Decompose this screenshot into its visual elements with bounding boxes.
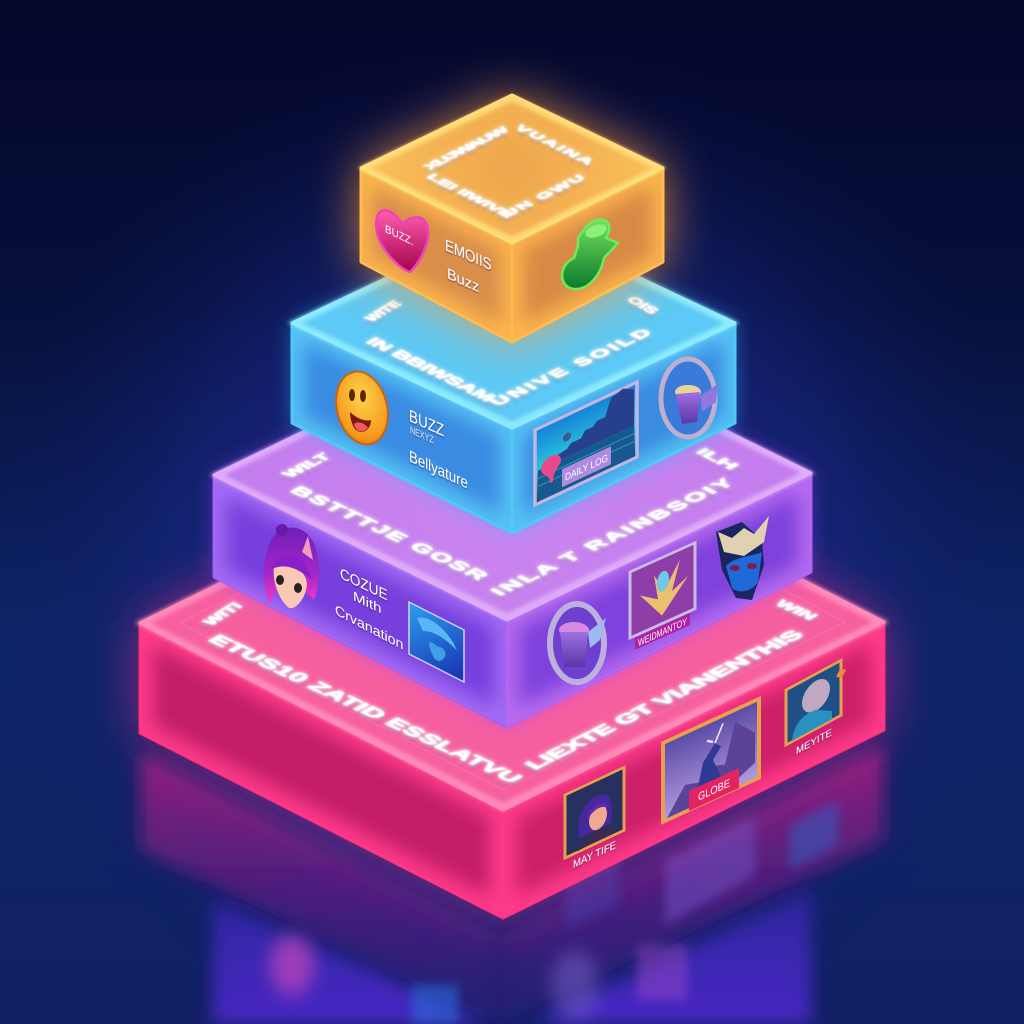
heart icon xyxy=(376,210,428,272)
purple face text: COZUE xyxy=(340,565,388,604)
smiley icon xyxy=(329,366,395,450)
anime face icon xyxy=(264,524,319,608)
heart icon: BUZZ. xyxy=(385,223,414,248)
tier 1: orange top xyxy=(361,95,663,342)
portrait label: MAY TIFE xyxy=(573,839,616,871)
blue glow xyxy=(292,218,735,533)
orange top face xyxy=(361,95,663,243)
orange face text xyxy=(445,236,492,296)
tier 3: purple xyxy=(203,424,822,732)
purple top ring text: INLA T RAINBSOIY xyxy=(486,476,739,598)
pink top ring text: LIEXTE GT VIANENTHIS xyxy=(519,627,809,772)
hero frame xyxy=(786,658,846,763)
landscape frame with ribbon xyxy=(663,699,759,823)
pink top ring text: ETUS10 ZATID ESSLATVU xyxy=(203,632,528,785)
mask icon xyxy=(716,516,769,600)
orange face text: Buzz xyxy=(447,265,479,296)
blue top ring text: UNIVE SOILD xyxy=(486,327,657,408)
ring with cup icon xyxy=(550,604,606,682)
blue top face xyxy=(292,218,735,428)
green shape icon xyxy=(562,219,618,289)
purple top ring text: ILH xyxy=(692,446,743,472)
purple top face xyxy=(214,328,811,620)
blue face text xyxy=(409,405,468,493)
orange top ring text xyxy=(421,124,597,219)
tier 2: blue xyxy=(292,218,735,533)
blue face text: Bellyature xyxy=(409,447,468,493)
purple face text: Crvanation xyxy=(335,602,403,654)
floor reflection xyxy=(140,745,884,1024)
landscape screen xyxy=(535,382,637,505)
hero label: MEYITE xyxy=(796,727,832,757)
blue top ring text: OIS xyxy=(623,295,661,316)
blue face text: NEXYZ xyxy=(410,425,434,446)
purple face text: Mith xyxy=(353,588,381,616)
purple face text xyxy=(335,565,403,654)
tier 4: pink base xyxy=(104,548,920,944)
purple top ring text xyxy=(278,446,743,598)
flower caption: WEIDMANTOY xyxy=(638,617,687,649)
pink top ring text: WIN xyxy=(771,598,822,622)
orange top ring text: VUAINA xyxy=(511,124,597,167)
screen caption: DAILY LOG xyxy=(565,452,608,484)
blue top ring text: WITE xyxy=(362,299,405,323)
orange top ring text: XUJWAUW xyxy=(421,126,513,171)
pink top ring text: WITI xyxy=(200,600,246,627)
pink top ring text xyxy=(200,598,822,785)
blue tile xyxy=(409,602,464,682)
blue top ring text: IN BBIWSAM xyxy=(361,336,500,404)
ribbon: GLOBE xyxy=(698,778,730,804)
purple side faces xyxy=(214,473,811,727)
portrait frame xyxy=(565,767,624,875)
purple top ring text: BSTTTJE GOSR xyxy=(285,484,493,582)
orange face text: EMOIIS xyxy=(445,236,492,275)
blue side faces xyxy=(292,323,735,533)
blue face text: BUZZ xyxy=(409,405,444,441)
flower frame xyxy=(630,543,695,653)
pink top face xyxy=(140,435,884,810)
purple glow xyxy=(214,328,811,727)
orange top ring text: LEI IIWIVE xyxy=(423,173,517,219)
orange top ring text: UN GWU xyxy=(499,174,589,218)
ring with cup icon xyxy=(661,359,718,437)
orange glow xyxy=(361,95,663,342)
purple top ring text: WILT xyxy=(278,451,335,480)
orange side faces xyxy=(361,168,663,342)
pink glow xyxy=(140,435,884,918)
pink side faces xyxy=(140,622,884,918)
blue top ring text xyxy=(361,295,661,408)
